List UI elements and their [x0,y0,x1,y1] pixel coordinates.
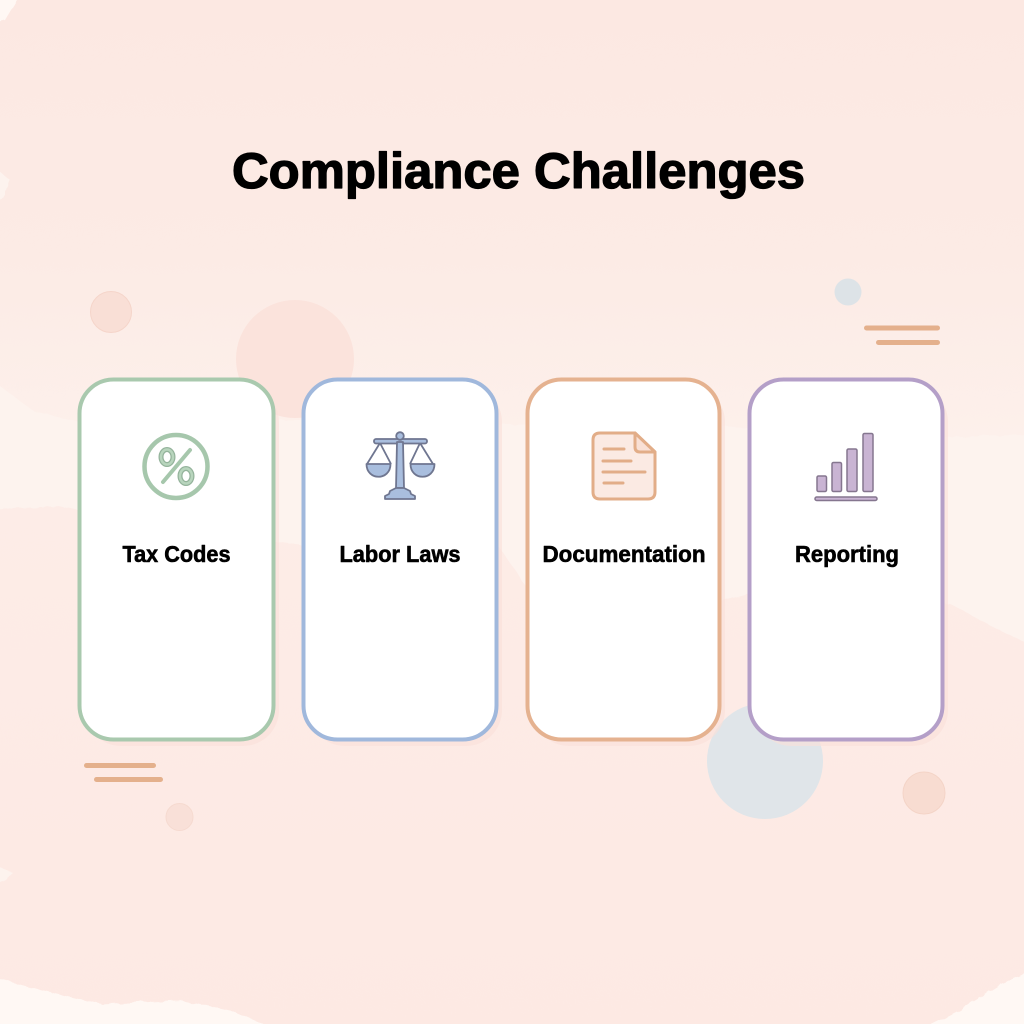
decorative circles and lines [84,278,945,830]
icon: bar chart [815,434,877,500]
card: Tax Codes [80,380,279,746]
icon: scales [366,432,434,499]
label: Reporting [795,541,899,567]
title: Compliance Challenges [232,143,805,199]
icon: percent [144,435,208,498]
card: Reporting [750,380,948,746]
icon: document [593,433,655,499]
label: Tax Codes [122,541,230,567]
label: Labor Laws [340,541,460,567]
card: Documentation [528,380,725,746]
card: Labor Laws [304,380,502,746]
label: Documentation [542,541,706,567]
